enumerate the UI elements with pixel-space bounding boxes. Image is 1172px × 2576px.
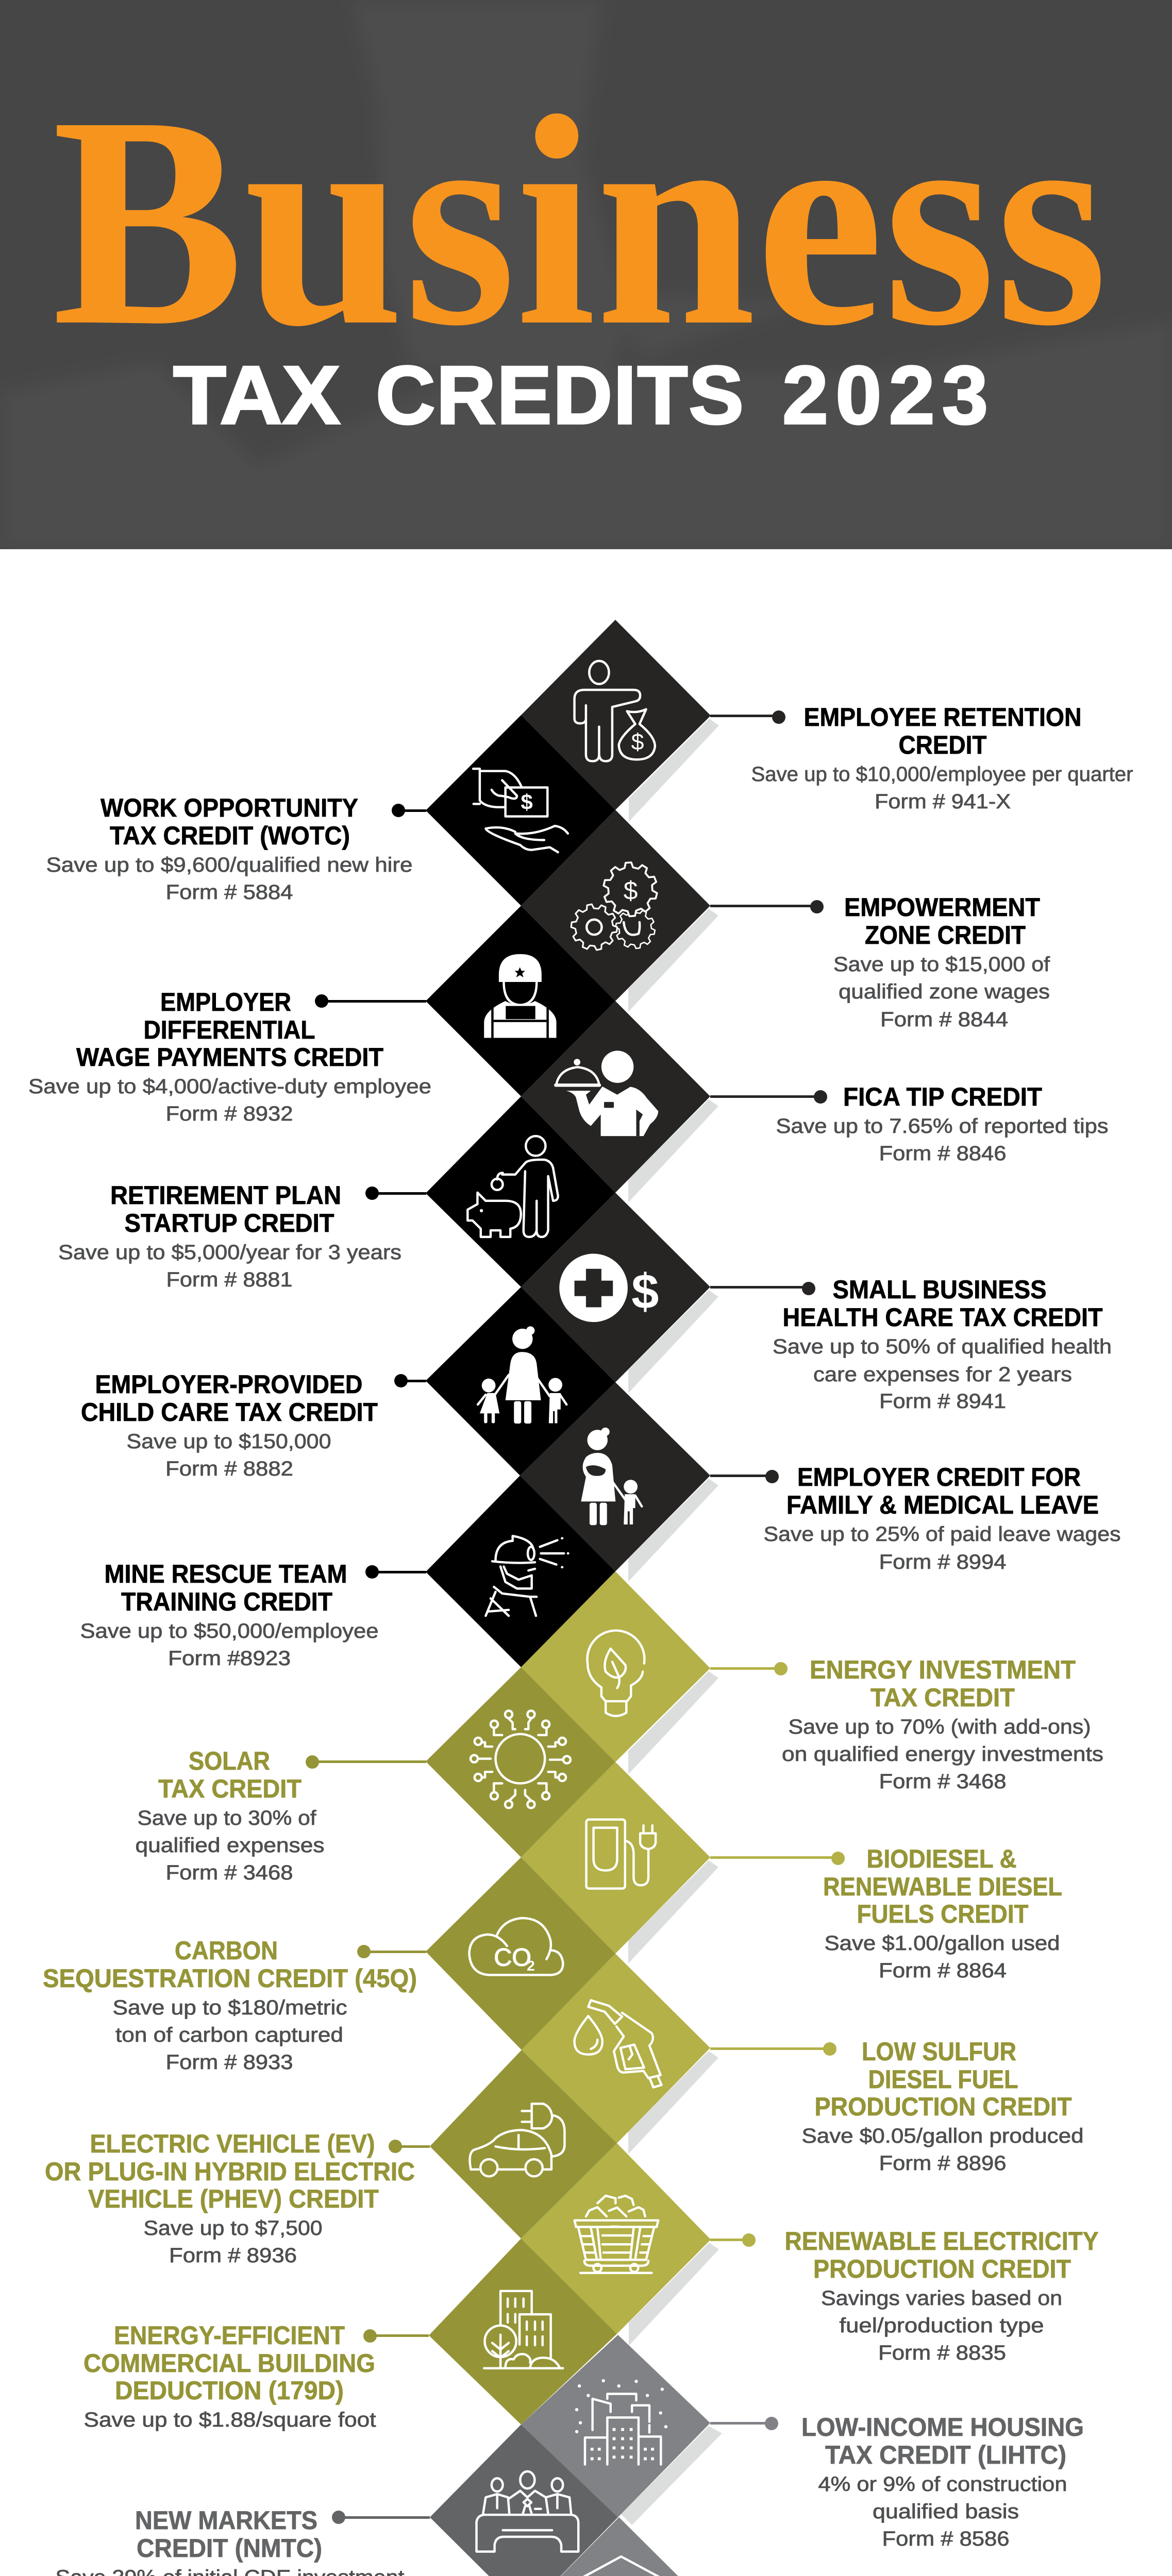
- text: EMPLOYER CREDIT FOR: [797, 1463, 1081, 1492]
- text: TRAINING CREDIT: [121, 1587, 332, 1616]
- text: LOW-INCOME HOUSING: [801, 2413, 1084, 2442]
- credit: Biodiesel and Renewable Diesel Fuels Credit: [521, 1762, 1062, 1982]
- icon: gears with dollar: $: [624, 876, 638, 905]
- icon: light bulb with leaf: [587, 1631, 644, 1716]
- icon: CO2 cloud: 2: [527, 1958, 535, 1974]
- connector: [389, 2140, 430, 2153]
- text: fuel/production type: [839, 2314, 1044, 2337]
- subtitle: Tax Credits 2023: TAX: [173, 349, 340, 441]
- connector: [710, 2417, 778, 2430]
- text: FUELS CREDIT: [857, 1900, 1029, 1928]
- icon: mother with baby and child: [581, 1428, 642, 1525]
- text: OR PLUG-IN HYBRID ELECTRIC: [45, 2157, 415, 2186]
- text: TAX CREDIT: [158, 1774, 302, 1803]
- subtitle: Tax Credits 2023: [173, 349, 988, 441]
- text: RENEWABLE ELECTRICITY: [784, 2227, 1099, 2256]
- text: CREDIT (NMTC): [137, 2534, 322, 2563]
- icon: medical cross and dollar: [559, 1253, 659, 1322]
- icon: fuel nozzle and drop: [575, 2000, 662, 2087]
- text: Form # 8881: [166, 1268, 293, 1291]
- icon: gears with dollar: [569, 857, 663, 952]
- diamond: [429, 2239, 617, 2425]
- connector: [710, 2233, 756, 2247]
- text: Form # 8586: [882, 2528, 1009, 2550]
- text: [28, 988, 431, 1125]
- icon: mother with two children: [478, 1326, 566, 1423]
- text: HEALTH CARE TAX CREDIT: [782, 1303, 1103, 1332]
- text: Save up to $5,000/year for 3 years: [58, 1241, 401, 1264]
- icon: city skyline: [575, 2379, 667, 2465]
- connector: [710, 710, 785, 724]
- text: Form # 8994: [879, 1551, 1006, 1573]
- connector: [357, 1945, 426, 1958]
- text: Save up to $1.88/square foot: [83, 2409, 376, 2431]
- title: Business: Business: [52, 54, 1108, 388]
- diamond: [521, 810, 710, 1001]
- text: [56, 2506, 405, 2576]
- icon: CO2 cloud: CO: [494, 1943, 531, 1971]
- text: Form # 3468: [166, 1861, 293, 1884]
- text: Save up to $9,600/qualified new hire: [46, 854, 412, 876]
- text: DEDUCTION (179D): [115, 2376, 344, 2405]
- text: [773, 1275, 1112, 1413]
- text: Save up to $180/metric: [112, 1996, 347, 2019]
- text: Form # 3468: [879, 1770, 1006, 1793]
- text: CHILD CARE TAX CREDIT: [81, 1398, 378, 1427]
- text: Form #8923: [168, 1647, 291, 1670]
- text: Form # 8846: [879, 1142, 1006, 1165]
- connector: [365, 1565, 426, 1579]
- connector: [710, 900, 824, 913]
- credit: Energy Investment Tax Credit: [521, 1571, 1103, 1793]
- text: FICA TIP CREDIT: [843, 1082, 1042, 1111]
- text: Form # 8941: [879, 1390, 1006, 1413]
- diamond: [426, 1857, 615, 2050]
- credit: Low-Income Housing Tax Credit: [521, 2335, 1084, 2550]
- header banner: [0, 0, 1172, 549]
- text: Form # 8936: [169, 2244, 297, 2267]
- connector: [710, 1282, 815, 1295]
- text: Save up to $50,000/employee: [80, 1620, 378, 1642]
- credit: Empowerment Zone Credit: [521, 810, 1050, 1031]
- text: [784, 2227, 1099, 2364]
- text: SOLAR: [189, 1747, 270, 1775]
- diamond: [522, 1954, 710, 2143]
- icon: soldier worker: [484, 954, 556, 1039]
- text: [802, 2037, 1083, 2175]
- diamond: [520, 1382, 710, 1571]
- text: [833, 893, 1050, 1031]
- icon: person and piggy bank: [467, 1136, 558, 1237]
- icon: hand and money: $: [521, 790, 533, 814]
- diamond: [426, 1476, 615, 1667]
- icon: historic building: [575, 2556, 669, 2576]
- text: PRODUCTION CREDIT: [814, 2092, 1072, 2121]
- text: TAX CREDIT (LIHTC): [825, 2441, 1066, 2469]
- text: qualified expenses: [135, 1834, 325, 1857]
- credit: Renewable Electricity Production Credit: [521, 2143, 1099, 2364]
- text: [43, 1936, 417, 2074]
- connector: [332, 2511, 430, 2524]
- text: [782, 1655, 1103, 1793]
- text: COMMERCIAL BUILDING: [83, 2349, 375, 2378]
- connector: [392, 804, 426, 817]
- text: 4% or 9% of construction: [818, 2473, 1067, 2496]
- connector: [710, 2042, 836, 2056]
- text: [776, 1082, 1108, 1165]
- credit: Carbon Sequestration Credit: [43, 1857, 615, 2074]
- text: BIODIESEL &: [867, 1844, 1016, 1873]
- text: Form # 8844: [880, 1008, 1008, 1031]
- text: TAX CREDIT: [870, 1683, 1015, 1712]
- diamond: [426, 1667, 615, 1857]
- text: MINE RESCUE TEAM: [104, 1560, 347, 1588]
- text: Save up to 7.65% of reported tips: [776, 1115, 1108, 1138]
- text: PRODUCTION CREDIT: [813, 2255, 1071, 2283]
- text: ENERGY-EFFICIENT: [114, 2321, 345, 2350]
- text: WORK OPPORTUNITY: [101, 793, 358, 822]
- text: [81, 1370, 378, 1480]
- text: ELECTRIC VEHICLE (EV): [90, 2129, 375, 2158]
- connector: [710, 1852, 845, 1865]
- credit: Electric Vehicle Credit: [45, 2050, 617, 2267]
- connector: [306, 1755, 426, 1769]
- diamond: [521, 1571, 710, 1762]
- text: STARTUP CREDIT: [125, 1209, 334, 1238]
- connector: [710, 1090, 827, 1104]
- credit: FICA Tip Credit: [521, 1001, 1108, 1193]
- diamond: [426, 715, 615, 906]
- text: [46, 793, 412, 904]
- text: [823, 1844, 1062, 1982]
- icon: waiter with cloche: [554, 1050, 658, 1136]
- diamond: [521, 1001, 710, 1193]
- text: EMPOWERMENT: [844, 893, 1040, 922]
- credit: Solar Tax Credit: [135, 1667, 615, 1884]
- icon: green buildings: [484, 2291, 563, 2368]
- text: [58, 1181, 401, 1291]
- text: Form # 8882: [165, 1458, 293, 1480]
- text: RETIREMENT PLAN: [110, 1181, 341, 1210]
- diamond: [521, 620, 711, 810]
- text: NEW MARKETS: [135, 2506, 317, 2535]
- text: Save $1.00/gallon used: [825, 1932, 1060, 1955]
- text: Save up to 70% (with add-ons): [789, 1716, 1091, 1738]
- credit: Employer Differential Wage Payments Credit: [28, 906, 615, 1125]
- text: Form # 941-X: [875, 790, 1011, 813]
- text: Form # 5884: [166, 881, 293, 904]
- connector: [710, 1470, 779, 1483]
- diamond: [521, 1193, 710, 1382]
- text: Save $0.05/gallon produced: [802, 2125, 1083, 2147]
- diamond: [426, 1096, 615, 1287]
- credit: Employer-Provided Child Care Tax Credit: [81, 1287, 615, 1480]
- icon: miner with headlamp: [485, 1536, 568, 1616]
- subtitle: Tax Credits 2023: 2023: [782, 349, 988, 441]
- diamond: [426, 906, 615, 1096]
- icon: CO2 cloud: [469, 1918, 563, 1975]
- text: ton of carbon captured: [115, 2024, 343, 2046]
- icon: electric car with plug: [470, 2104, 564, 2176]
- text: [764, 1463, 1120, 1573]
- text: EMPLOYER: [160, 988, 291, 1016]
- text: qualified basis: [873, 2500, 1019, 2523]
- text: ENERGY INVESTMENT: [810, 1655, 1076, 1684]
- text: Form # 8932: [166, 1103, 293, 1125]
- text: Form # 8864: [879, 1959, 1007, 1982]
- text: [135, 1747, 325, 1884]
- credit: Mine Rescue Team Training Credit: [80, 1476, 615, 1670]
- icon: medical cross and dollar: $: [631, 1264, 659, 1319]
- text: CREDIT: [899, 731, 986, 759]
- text: [751, 703, 1133, 813]
- diamond drop shadows: [621, 719, 739, 2576]
- diamond: [430, 2425, 618, 2576]
- credit: Employee Retention Credit: [521, 620, 1133, 813]
- text: VEHICLE (PHEV) CREDIT: [88, 2184, 379, 2213]
- icon: panel of investors at desk: [477, 2471, 578, 2552]
- connector: [363, 2329, 429, 2343]
- connector: [365, 1187, 426, 1200]
- text: Form # 8835: [878, 2342, 1006, 2364]
- text: EMPLOYER-PROVIDED: [95, 1370, 363, 1399]
- credit: Work Opportunity Tax Credit: [46, 715, 615, 906]
- text: CARBON: [175, 1936, 278, 1965]
- credit: New Markets Credit: [56, 2425, 618, 2576]
- text: Save up to $4,000/active-duty employee: [28, 1075, 431, 1098]
- text: WAGE PAYMENTS CREDIT: [76, 1043, 383, 1072]
- diamond: [521, 1762, 710, 1954]
- icon: sun circuit: [471, 1711, 571, 1808]
- icon: person with money bag: $: [631, 730, 644, 755]
- text: ZONE CREDIT: [865, 921, 1026, 950]
- credit: Employer Credit for Family and Medical Leave: [520, 1382, 1120, 1573]
- diamond: [430, 2050, 617, 2239]
- text: on qualified energy investments: [782, 1743, 1103, 1766]
- text: Save up to $10,000/employee per quarter: [751, 763, 1133, 786]
- icon: coal cart: [575, 2196, 658, 2273]
- text: SMALL BUSINESS: [833, 1275, 1046, 1304]
- credit: Low Sulfur Diesel Fuel Production Credit: [522, 1954, 1083, 2175]
- text: Save up to 30% of: [137, 1807, 316, 1829]
- connector: [315, 994, 426, 1008]
- text: care expenses for 2 years: [813, 1363, 1072, 1386]
- text: DIESEL FUEL: [868, 2065, 1018, 2094]
- connector: [710, 1662, 788, 1675]
- credit: Energy-Efficient Commercial Building Deduction: [83, 2239, 617, 2431]
- text: Form # 8896: [879, 2152, 1006, 2175]
- text: TAX CREDIT (WOTC): [110, 821, 350, 850]
- text: LOW SULFUR: [862, 2037, 1016, 2066]
- credit: Retirement Plan Startup Credit: [58, 1096, 615, 1291]
- text: Save up to $150,000: [127, 1430, 331, 1453]
- icon: charging pump: [587, 1820, 656, 1889]
- diamond: [521, 2143, 711, 2334]
- text: SEQUESTRATION CREDIT (45Q): [43, 1964, 417, 1993]
- icon: hand and money: [473, 769, 568, 852]
- text: Save up to 50% of qualified health: [773, 1335, 1112, 1358]
- connector: [394, 1374, 426, 1387]
- text: Savings varies based on: [821, 2287, 1062, 2310]
- text: FAMILY & MEDICAL LEAVE: [786, 1490, 1099, 1519]
- text: EMPLOYEE RETENTION: [804, 703, 1081, 732]
- text: Save up to $15,000 of: [833, 953, 1050, 976]
- diamond: [525, 2517, 714, 2576]
- credit: Small Business Health Care Tax Credit: [521, 1193, 1112, 1413]
- diamond: [521, 2335, 710, 2517]
- text: [801, 2413, 1084, 2550]
- text: Save up to 25% of paid leave wages: [764, 1523, 1120, 1546]
- subtitle: Tax Credits 2023: CREDITS: [376, 349, 744, 441]
- text: [80, 1560, 378, 1670]
- text: [83, 2321, 376, 2431]
- icon: person with money bag: [575, 661, 655, 761]
- text: Save up to $7,500: [143, 2217, 323, 2240]
- text: qualified zone wages: [839, 980, 1050, 1003]
- text: DIFFERENTIAL: [143, 1015, 315, 1044]
- credit: Historic Rehabilitation Tax Credit: [525, 2517, 1044, 2576]
- text: RENEWABLE DIESEL: [823, 1872, 1062, 1901]
- text: [45, 2129, 415, 2267]
- text: Form # 8933: [166, 2051, 293, 2074]
- diamond: [426, 1287, 615, 1476]
